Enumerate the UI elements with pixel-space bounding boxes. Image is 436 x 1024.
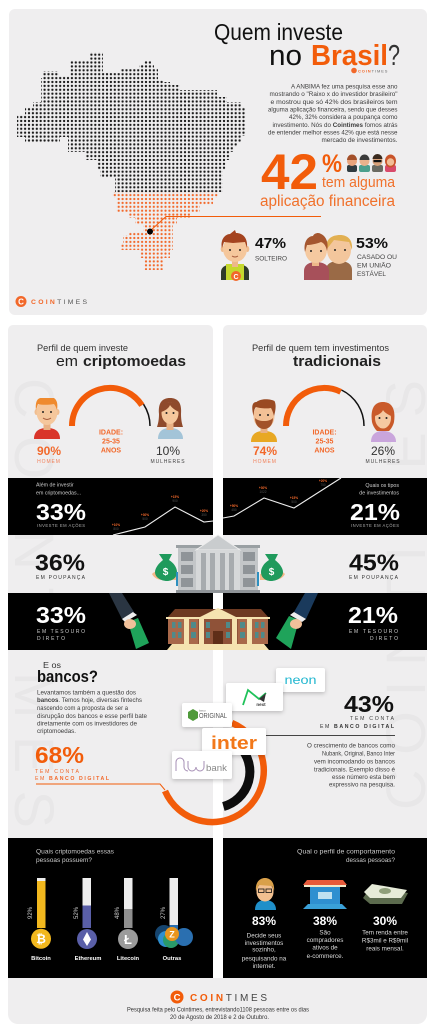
- thermometer: bitcoin: ₿: [36, 932, 46, 946]
- line chart right: +15%: [290, 496, 298, 500]
- line chart left: 350: [201, 513, 207, 517]
- stat: 43% digital bank: 43%: [344, 691, 394, 717]
- card: banco original: banco: [199, 710, 206, 712]
- black band: treasury left: [8, 593, 213, 650]
- stat: 47% single: 47%: [255, 235, 286, 252]
- illustration: grey bank: [176, 535, 260, 593]
- intro paragraph: e mostrou que só 42% dos brasileiros tem: [270, 99, 398, 106]
- heading: traditional profile: tradicionais: [293, 353, 381, 370]
- stat: 83%: 83%: [252, 914, 276, 928]
- banks paragraph: disrupção dos bancos e esse perfil bate: [37, 713, 147, 720]
- stat: 21% stocks: 21%: [350, 499, 400, 525]
- watermark right: COINTIMES: [374, 380, 436, 810]
- stat: 68% digital bank: [35, 742, 110, 782]
- right banks paragraph: expressivo na pesquisa.: [329, 782, 395, 789]
- illustration: brown bank: [166, 608, 270, 650]
- thermometer: bitcoin: [28, 878, 51, 962]
- black band: shares right: [223, 478, 427, 535]
- avatar: woman right: [371, 402, 396, 442]
- card: nubank: bank: [206, 763, 227, 774]
- card: next: [226, 683, 283, 711]
- stat: 33% stocks: Além de investir: [36, 483, 74, 489]
- thermometer: others: Z: [169, 930, 175, 940]
- stat: 38%: São: [319, 930, 331, 936]
- panel: crypto holdings: [8, 838, 213, 978]
- black band: treasury right: [223, 593, 427, 650]
- stat: 90% men: [37, 444, 61, 465]
- line chart right: +30%: [259, 486, 267, 490]
- stat: 68% digital bank: 68%: [35, 742, 84, 768]
- banks paragraph: nascendo com a proposta de ser a: [37, 705, 128, 712]
- stat: 21% treasury: DIRETO: [370, 636, 398, 642]
- stat: 83%: Decide seus: [247, 933, 281, 940]
- stat: 26% women: 26%: [371, 444, 395, 458]
- panel: intro background: [9, 9, 427, 315]
- intro paragraph: 42%, 32% considera a poupança como: [289, 114, 398, 121]
- stat: 33% stocks: [36, 483, 86, 528]
- stat: 10% women: 10%: [156, 444, 180, 458]
- banks paragraph: bancos. Temos hoje, diversas fintechs: [37, 697, 142, 704]
- stat: 90% men: HOMEM: [37, 459, 61, 465]
- watermark left: COINTIMES: [3, 378, 66, 828]
- icon: money bag right: [257, 554, 285, 586]
- stat: 26% women: [366, 444, 400, 465]
- age label right: IDADE:: [312, 430, 337, 436]
- logo: intro footer: C: [18, 298, 24, 306]
- banks paragraph: Levantamos também a questão dos: [37, 690, 136, 696]
- stat: 33% treasury: DIRETO: [37, 636, 65, 642]
- avatar: man right: [251, 399, 277, 442]
- stat: 53% married: EM UNIÃO: [357, 262, 391, 270]
- right banks paragraph: esse número esta bem: [332, 774, 395, 781]
- thermometer: ethereum: Ethereum: [75, 956, 101, 962]
- icon: laptop shop: [303, 880, 347, 909]
- line chart right: 500: [291, 500, 297, 504]
- thermometer: litecoin: Ł: [124, 932, 132, 947]
- big stat 42%: aplicação financeira: [260, 193, 395, 210]
- stat: 90% men: 90%: [37, 444, 61, 458]
- icon: money bag left: $: [163, 567, 169, 578]
- big stat 42%: [260, 144, 396, 210]
- stat: 43% digital bank: EM BANCO DIGITAL: [320, 724, 395, 730]
- avatar: single man: C: [233, 274, 239, 281]
- stat: 30%: Tem renda entre: [362, 930, 408, 937]
- line chart right: 750: [320, 483, 326, 487]
- stat: 43% digital bank: [320, 691, 395, 730]
- stat: 30%: [362, 914, 408, 953]
- right banks paragraph: [307, 743, 395, 789]
- panel: behavior profile: [223, 838, 427, 978]
- heading: traditional profile: Perfil de quem tem investimentos: [252, 343, 390, 353]
- thermometer: others: Outras: [163, 956, 181, 962]
- stat: 33% treasury: EM TESOURO: [37, 629, 85, 635]
- stat: 83%: investimentos: [245, 940, 283, 947]
- stat: 68% digital bank: EM BANCO DIGITAL: [35, 776, 110, 782]
- stat: 33% stocks: 33%: [36, 499, 86, 525]
- age label left: [99, 430, 123, 454]
- line chart left: 900: [172, 499, 178, 503]
- stat: 43% digital bank: TEM CONTA: [350, 716, 395, 722]
- title: [214, 19, 400, 72]
- crypto question: Quais criptomoedas essas: [36, 848, 114, 855]
- age label left: ANOS: [101, 448, 121, 454]
- age label right: ANOS: [314, 448, 335, 454]
- big stat 42%: %: [322, 150, 342, 178]
- map of Brazil: [17, 52, 246, 270]
- age label right: 25-35: [316, 438, 334, 446]
- icon: money bag right: $: [269, 567, 275, 578]
- black band: shares left: [8, 478, 213, 535]
- thermometer: others: 27%: [161, 906, 167, 919]
- card: banco original: ORIGINAL: [199, 711, 227, 720]
- heading: banks: bancos?: [37, 667, 98, 686]
- line chart left: 500: [142, 517, 148, 521]
- intro paragraph: investimento. Nós do Cointimes fomos atrás: [272, 122, 398, 129]
- line chart left: [112, 495, 213, 535]
- intro paragraph: mostrando o "Raixo x do investidor brasileiro": [270, 91, 398, 98]
- icons: four investors: [347, 154, 396, 172]
- stat: 10% women: [151, 444, 185, 465]
- thermometer: litecoin: [115, 878, 140, 962]
- stat: 53% married: ESTÁVEL: [357, 271, 387, 278]
- gauge: crypto gender: [72, 388, 150, 426]
- banks paragraph: [37, 690, 147, 735]
- behavior question: dessas pessoas?: [346, 857, 395, 864]
- stat: 21% stocks: Quais os tipos: [365, 483, 399, 489]
- divider under 43%: [266, 735, 395, 736]
- stat: 83%: [242, 914, 287, 970]
- logo: intro footer: COIN TIMES: [31, 299, 87, 306]
- stat: 47% single: [255, 235, 287, 262]
- footer note: Pesquisa feita pelo Cointimes, entrevistando1108 pessoas entre os dias: [127, 1007, 309, 1014]
- heading: banks: E os: [43, 660, 61, 670]
- stat: 83%: internet.: [253, 963, 276, 970]
- title: Brasil: [311, 40, 388, 72]
- small logo: COINTIMES: [358, 68, 388, 74]
- stat: 38%: 38%: [313, 914, 337, 928]
- heading: crypto profile: Perfil de quem investe: [37, 343, 128, 353]
- icon: investor with glasses: [255, 878, 276, 910]
- crypto question: [36, 848, 114, 864]
- footer logo: C: [174, 992, 181, 1004]
- panel: footer background: [8, 978, 427, 1024]
- stat: 21% treasury: [348, 602, 398, 642]
- stat: 38%: e-commerce.: [307, 953, 344, 960]
- stat: 38%: ativos de: [312, 944, 338, 952]
- ring chart: [165, 723, 264, 822]
- illustration: hand with cash right: [276, 593, 318, 649]
- stat: 30%: 30%: [373, 914, 397, 928]
- heading: crypto profile: criptomoedas: [83, 353, 186, 370]
- thermometer: ethereum: 52%: [74, 906, 80, 919]
- stat: 53% married: CASADO OU: [357, 255, 397, 261]
- map marker: [147, 228, 153, 234]
- title: Quem investe: [214, 19, 343, 45]
- footer note: 20 de Agosto de 2018 e 2 de Outubro.: [170, 1014, 269, 1021]
- heading: banks: [37, 660, 98, 686]
- line chart right: +50%: [230, 504, 238, 508]
- stat: 68% digital bank: TEM CONTA: [35, 769, 80, 775]
- line chart left: +15%: [171, 495, 179, 499]
- line chart right: 1022: [259, 490, 267, 494]
- footer logo: [170, 990, 267, 1004]
- age label left: 25-35: [102, 438, 120, 446]
- avatar: man left: [34, 398, 60, 439]
- heading: traditional profile: [252, 343, 390, 370]
- line chart right: [223, 478, 341, 518]
- thermometer: ethereum: [74, 878, 101, 962]
- stat: 74% men: HOMEM: [253, 459, 277, 465]
- stat: 30%: R$3mil e R$9mil: [362, 937, 408, 944]
- stat: 53% married: [356, 235, 397, 278]
- heading: crypto profile: [37, 343, 186, 370]
- big stat 42%: tem alguma: [322, 174, 396, 191]
- panel: profile right background: [223, 325, 427, 845]
- intro paragraph: alguma aplicação financeira, sendo que desses: [268, 106, 398, 114]
- connector: 68% line: [36, 784, 165, 790]
- line chart right: 450: [231, 508, 237, 512]
- connector line: [150, 216, 321, 231]
- card: neon: [276, 668, 325, 692]
- stat: 38%: compradores: [307, 937, 343, 944]
- line chart left: +30%: [141, 513, 149, 517]
- behavior question: Qual o perfil de comportamento: [297, 848, 396, 855]
- intro paragraph: mercado de investimentos.: [322, 137, 398, 144]
- title: no: [269, 40, 302, 72]
- stat: 30%: reais mensal.: [366, 946, 404, 953]
- stat: 10% women: MULHERES: [151, 459, 185, 465]
- stat: 33% stocks: INVESTE EM AÇÕES: [37, 523, 85, 528]
- intro paragraph: de entender melhor esses 42% que está nesse: [268, 130, 398, 136]
- age label left: IDADE:: [99, 430, 123, 436]
- behavior question: [297, 848, 396, 864]
- stat: 74% men: 74%: [253, 444, 277, 458]
- line chart left: 800: [113, 527, 119, 531]
- stat: 21% stocks: de investimentos: [359, 490, 399, 496]
- intro paragraph: [268, 84, 398, 144]
- map: black region: [17, 52, 246, 192]
- crypto question: pessoas possuem?: [36, 857, 93, 864]
- stat: 47% single: SOLTEIRO: [255, 256, 287, 262]
- stat: 74% men: [253, 444, 277, 465]
- stat: 83%: pesquisando na: [242, 956, 287, 963]
- banks paragraph: diretamente com os investidores de: [37, 720, 137, 728]
- map: orange region: [112, 192, 218, 270]
- stat: 33% stocks: em criptomoedas...: [36, 490, 81, 496]
- stat: 21% treasury: 21%: [348, 602, 398, 628]
- stat: 36% savings: EM POUPANÇA: [36, 575, 86, 581]
- title: ?: [388, 40, 400, 72]
- stat: 33% treasury: 33%: [36, 602, 86, 628]
- stat: 83%: sozinho,: [252, 947, 276, 954]
- footer logo: COIN TIMES: [190, 993, 267, 1004]
- thermometer: litecoin: Litecoin: [117, 956, 140, 962]
- right banks paragraph: O crescimento de bancos como: [307, 743, 395, 750]
- gauge: traditional gender: [286, 388, 364, 426]
- stat: 53% married: 53%: [356, 235, 388, 252]
- line chart left: +20%: [200, 509, 208, 513]
- thermometer: bitcoin: 92%: [28, 906, 34, 919]
- card: next: next: [256, 702, 266, 707]
- stat: 21% stocks: [350, 483, 400, 528]
- right banks paragraph: Nubank, Original, Banco Inter: [322, 751, 395, 758]
- thermometer: litecoin: 48%: [115, 906, 121, 919]
- avatar: single man: [221, 230, 249, 281]
- card: inter: inter: [211, 733, 257, 753]
- panel: profile left background: [8, 325, 213, 845]
- stat: 36% savings: 36%: [35, 550, 85, 576]
- right banks paragraph: vem incomodando os bancos: [314, 758, 395, 765]
- right banks paragraph: tradicionais. Exemplo disso é: [314, 766, 395, 773]
- heading: crypto profile: em: [56, 353, 78, 370]
- footer note: [127, 1007, 309, 1021]
- logo: intro footer: [16, 296, 87, 307]
- icon: money bag left: [152, 554, 178, 586]
- line chart right: +20%: [319, 479, 327, 483]
- stat: 26% women: MULHERES: [366, 459, 400, 465]
- line chart left: +10%: [112, 523, 120, 527]
- card: inter: [202, 728, 266, 755]
- stat: 33% treasury: [36, 602, 86, 642]
- card: banco original: [182, 703, 232, 727]
- thermometer: others: [155, 878, 193, 962]
- age label right: [312, 430, 337, 454]
- stat: 21% treasury: EM TESOURO: [349, 629, 398, 635]
- avatar: couple: [304, 233, 352, 280]
- card: neon: neon: [284, 675, 316, 687]
- thermometer: bitcoin: Bitcoin: [31, 956, 51, 962]
- stat: 38%: [307, 914, 344, 960]
- illustration: hand with cash left: [109, 593, 149, 649]
- stat: 45% savings: 45%: [349, 550, 399, 576]
- banks paragraph: criptomoedas.: [37, 728, 76, 735]
- card: nubank: [172, 751, 232, 779]
- stat: 21% stocks: INVESTE EM AÇÕES: [351, 523, 399, 528]
- big stat 42%: 42: [261, 144, 318, 200]
- icon: cash stack: [363, 884, 408, 904]
- intro paragraph: A ANBIMA fez uma pesquisa esse ano: [291, 84, 398, 90]
- avatar: woman left: [157, 398, 183, 439]
- stat: 45% savings: EM POUPANÇA: [349, 575, 399, 581]
